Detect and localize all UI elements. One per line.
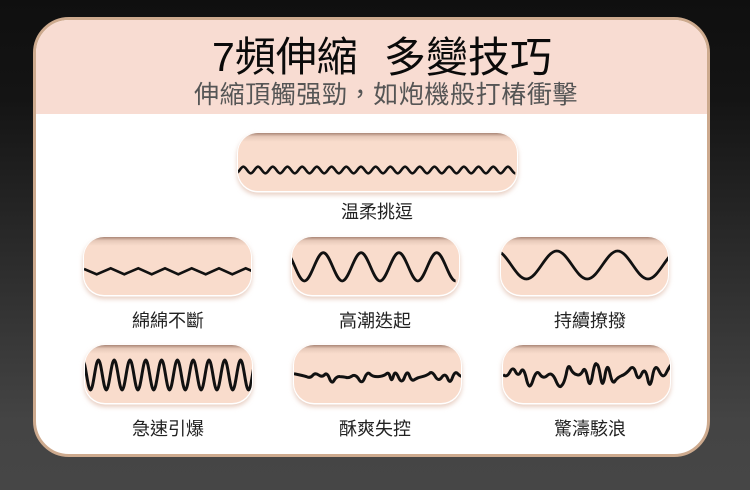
label: climax: 高潮迭起: [339, 311, 411, 331]
label: tingle: 酥爽失控: [339, 419, 411, 439]
label: rapid: 急速引爆: [132, 419, 204, 439]
pill: slow wave: [496, 236, 678, 299]
label: surge: 驚濤駭浪: [554, 419, 626, 439]
wave charts: [80, 133, 674, 410]
header band: [36, 20, 707, 114]
pill: gentle wave: [236, 132, 518, 195]
pill: fast wave: [83, 344, 256, 407]
label: teasing: 持續撩撥: [554, 311, 626, 331]
title: 7頻伸縮: [212, 34, 358, 80]
pill: tingle noise wave: [293, 344, 463, 407]
subtitle: 伸縮頂觸强勁，如炮機般打椿衝擊: [194, 75, 578, 111]
pill: tall wave: [286, 236, 460, 299]
title part two: 多變技巧: [384, 34, 552, 81]
pill: zigzag wave: [83, 236, 252, 299]
label: continuous: 綿綿不斷: [132, 311, 204, 331]
pill: surge noise wave: [502, 344, 672, 407]
label: gentle: 温柔挑逗: [341, 202, 413, 222]
